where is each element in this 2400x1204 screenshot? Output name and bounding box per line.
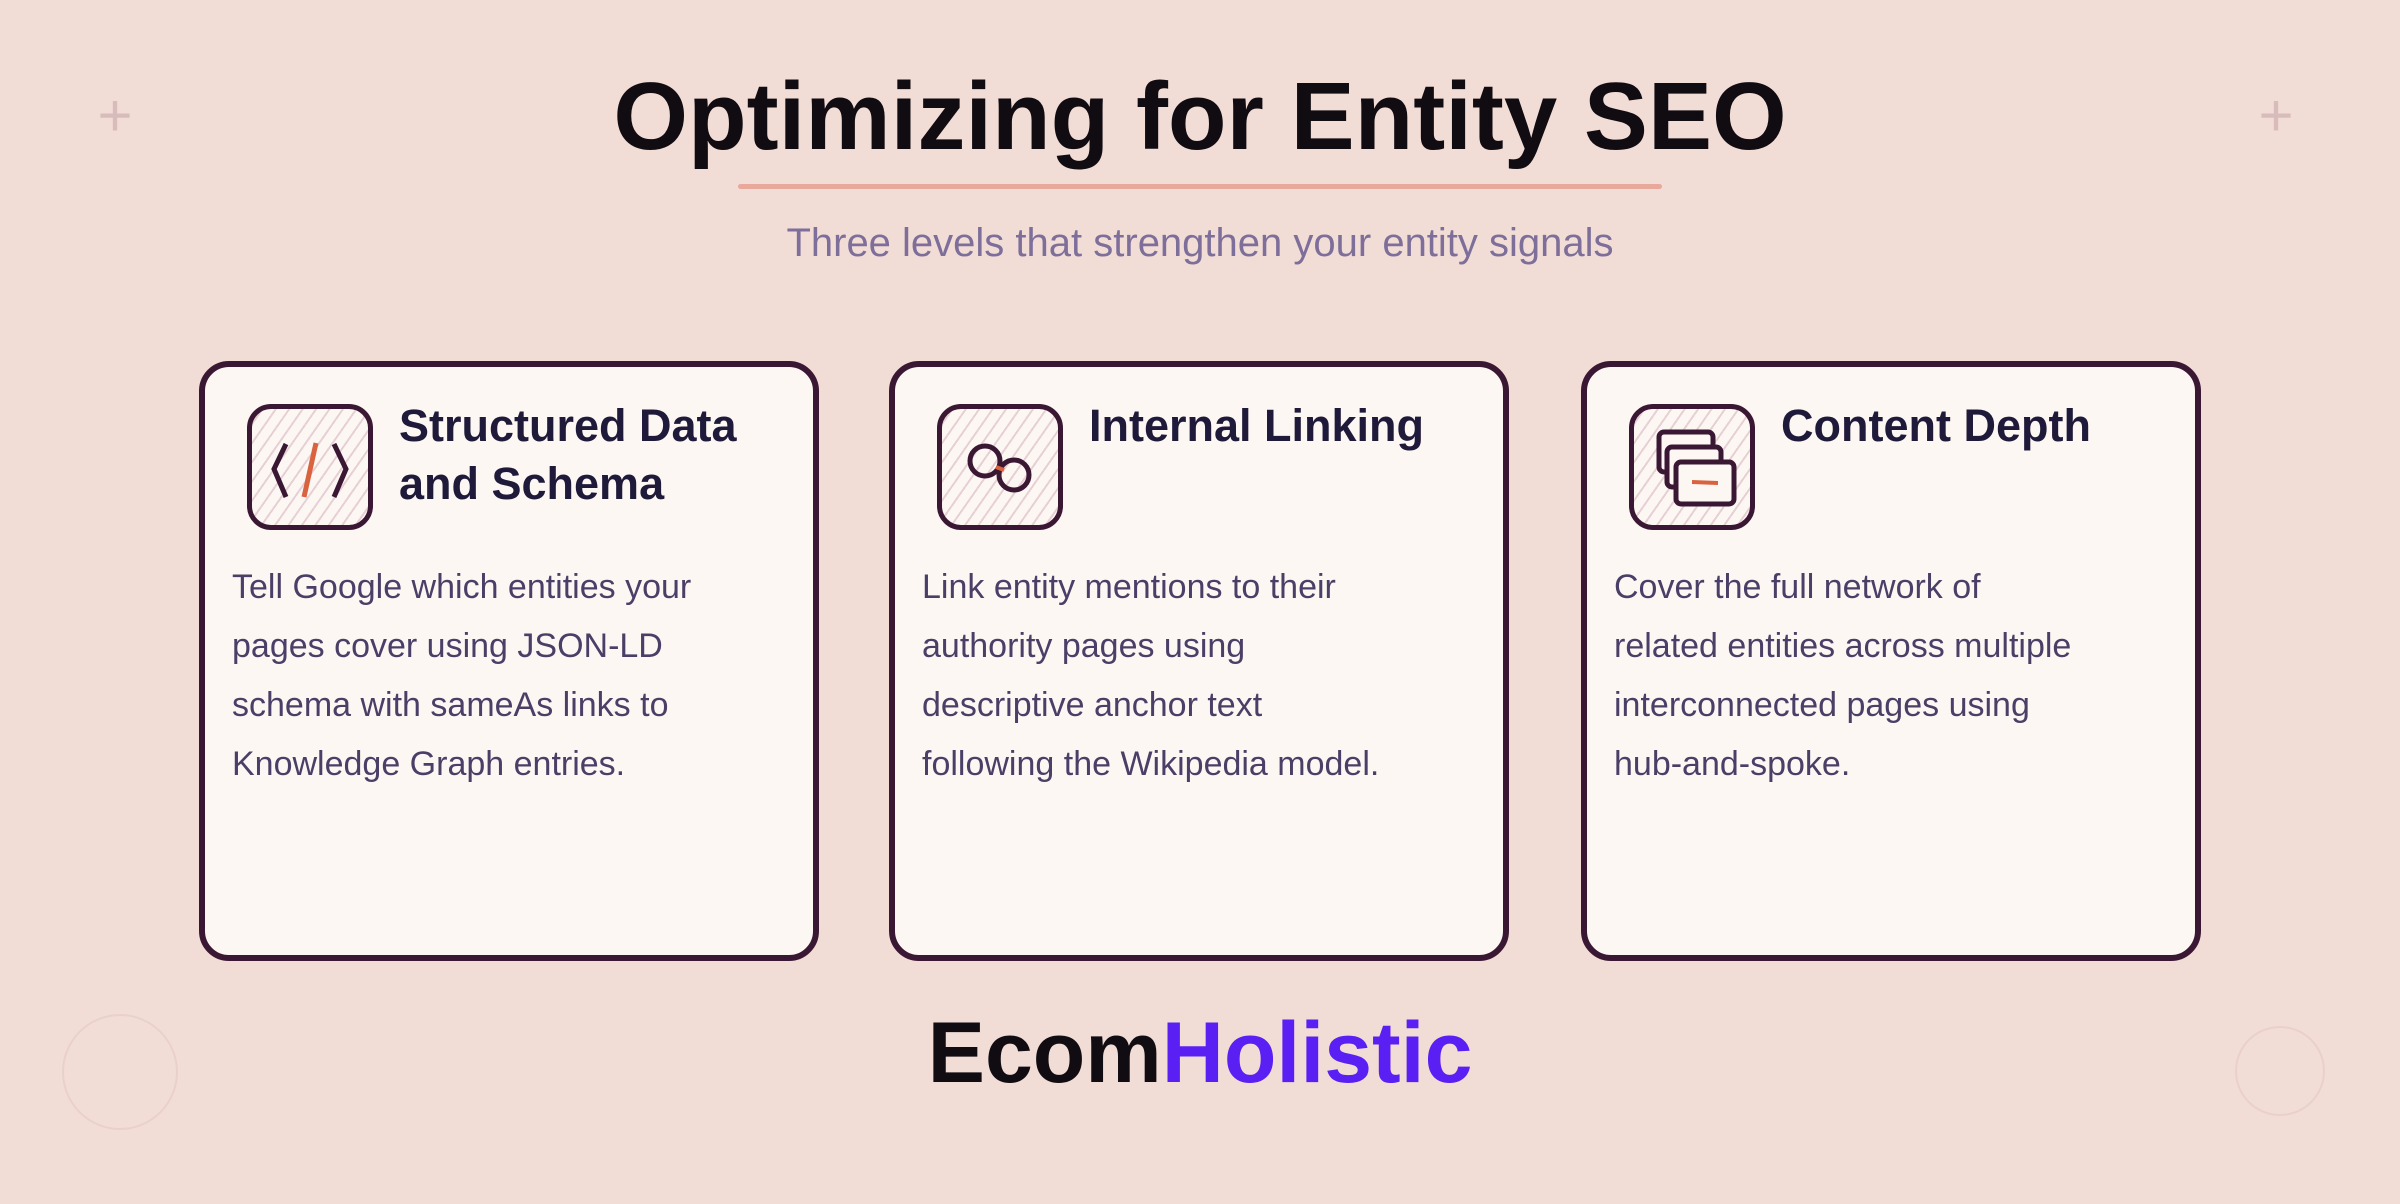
body text: interconnected pages using: [1614, 686, 2030, 724]
heading: Content Depth: [1781, 400, 2091, 451]
heading: and Schema: [399, 458, 664, 509]
decor plus left: +: [97, 82, 133, 149]
body text: schema with sameAs links to: [232, 686, 668, 724]
body text: [232, 568, 691, 783]
logo: EcomHolistic: [928, 1005, 1472, 1101]
body text: pages cover using JSON-LD: [232, 627, 663, 665]
body text: related entities across multiple: [1614, 627, 2071, 665]
panel: structured data: [199, 361, 819, 961]
panel: internal linking: [889, 361, 1509, 961]
body text: Knowledge Graph entries.: [232, 745, 625, 783]
subtitle: Three levels that strengthen your entity signals: [786, 221, 1614, 265]
decor circle left: [62, 1014, 178, 1130]
icon: stacked pages: [1629, 404, 1755, 530]
heading: Internal Linking: [1089, 400, 1424, 451]
body text: authority pages using: [922, 627, 1245, 665]
decor plus right: +: [2258, 82, 2294, 149]
title underline: [738, 184, 1662, 189]
body text: Tell Google which entities your: [232, 568, 691, 606]
title: Optimizing for Entity SEO: [613, 63, 1787, 170]
body text: [922, 568, 1379, 783]
heading: Structured Data: [399, 400, 737, 451]
panel: content depth: [1581, 361, 2201, 961]
icon: link rings: [937, 404, 1063, 530]
body text: Cover the full network of: [1614, 568, 1981, 606]
heading: [399, 400, 737, 509]
body text: Link entity mentions to their: [922, 568, 1336, 606]
body text: following the Wikipedia model.: [922, 745, 1379, 783]
decor circle right: [2235, 1026, 2325, 1116]
icon: code brackets: [247, 404, 373, 530]
body text: descriptive anchor text: [922, 686, 1262, 724]
body text: hub-and-spoke.: [1614, 745, 1850, 783]
body text: [1614, 568, 2071, 783]
